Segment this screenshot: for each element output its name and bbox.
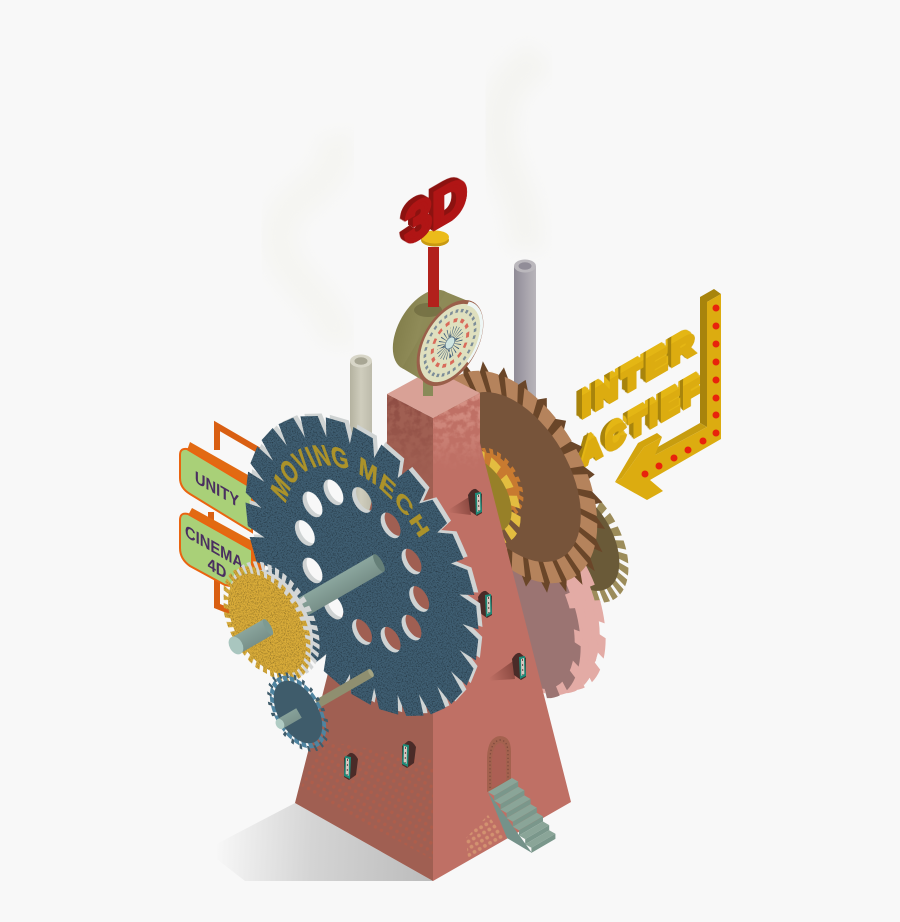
arrow head side [615, 433, 662, 482]
sign frame [211, 426, 260, 612]
sign unity: UNITY [195, 467, 240, 512]
khaki axle [315, 668, 375, 708]
gold gear face [225, 552, 309, 696]
olive gear [535, 463, 624, 616]
gold gear [225, 548, 316, 696]
orange small gear [473, 440, 521, 524]
arrow bar top [649, 423, 707, 455]
chimney left [350, 354, 372, 511]
door [487, 736, 511, 792]
main axle [291, 553, 387, 620]
tower [295, 369, 571, 881]
pink gear [472, 494, 602, 720]
gauge drum [393, 276, 473, 384]
small axle tip [274, 708, 302, 731]
smoke left [279, 135, 336, 345]
inter text: INTER [582, 325, 699, 425]
window right 3 [485, 653, 526, 681]
window left 2 [402, 741, 416, 768]
sign cinema 4d: 4D [208, 554, 226, 583]
window right 2 [461, 591, 492, 618]
pink gear face [472, 502, 578, 720]
short axle [226, 617, 275, 657]
sign cinema 4d [180, 508, 265, 590]
arrow [615, 289, 721, 500]
3D sign: 3D [405, 164, 467, 258]
ground shadow [205, 803, 433, 881]
tower right face [433, 393, 571, 881]
pink gear thickness [480, 494, 602, 717]
pole shadow [414, 303, 442, 317]
red pole [428, 247, 439, 307]
arrow side [700, 289, 721, 427]
actief text: ACTIEF [582, 370, 704, 474]
infographic illustration [179, 176, 721, 881]
tower top face [387, 369, 480, 418]
window right 1 [445, 489, 482, 516]
arrow face [615, 294, 721, 500]
gear face [245, 365, 479, 767]
chimney right [514, 260, 536, 406]
halftone right [466, 815, 505, 858]
grunge left [387, 394, 433, 480]
gauge pole stem [423, 378, 433, 396]
tower left face [295, 394, 433, 881]
gauge face [417, 285, 483, 401]
main blue gear [246, 414, 482, 716]
gold gear thickness [234, 548, 316, 690]
gear thickness [249, 362, 483, 765]
brown gear [436, 327, 605, 633]
gauge [393, 276, 483, 401]
small blue gear [269, 662, 327, 762]
window left 1 [344, 753, 358, 780]
gold inner gear [450, 438, 516, 552]
smoke right [498, 55, 540, 250]
sign cinema 4d: CINEMA [185, 521, 243, 574]
moving mech title: MOVING MECH [270, 445, 430, 538]
sign unity [180, 442, 262, 532]
halftone left [300, 740, 433, 860]
yellow disc [421, 230, 449, 246]
grunge right [433, 393, 480, 470]
arrow bulbs [642, 304, 720, 478]
stairs [488, 778, 555, 853]
